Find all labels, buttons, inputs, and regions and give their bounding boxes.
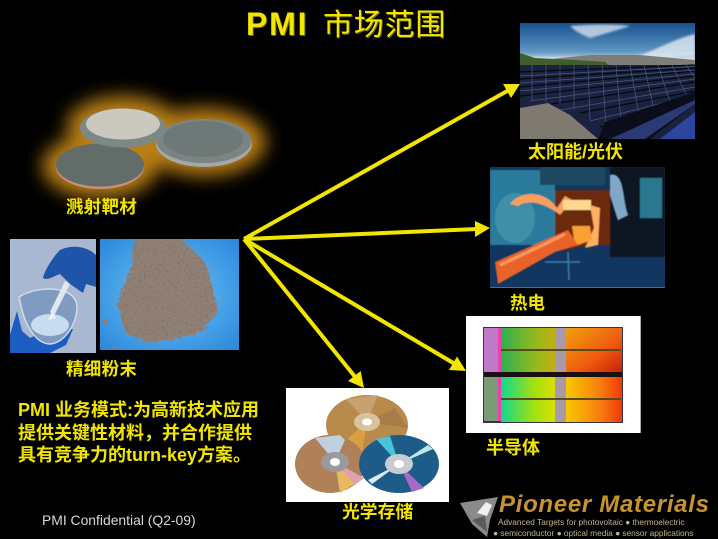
arrow: to optical storage [244, 239, 364, 388]
photo: semiconductor die [466, 316, 641, 433]
arrow: to solar [244, 84, 520, 239]
label: solar: 太阳能/光伏 [528, 142, 623, 162]
logo tagline: ● semiconductor ● optical media ● sensor applications [493, 528, 693, 538]
business model text: 提供关键性材料，并合作提供 [18, 423, 252, 443]
label: thermoelectric: 热电 [510, 293, 545, 313]
logo wordmark: Pioneer Materials [499, 491, 710, 518]
label: sputtering targets: 溅射靶材 [66, 197, 137, 217]
business model text: 具有竞争力的turn-key方案。 [18, 445, 251, 465]
business model text [18, 400, 259, 465]
title: PMI [246, 6, 308, 42]
logo mark [460, 497, 498, 537]
business model text: PMI 业务模式:为高新技术应用 [18, 400, 259, 420]
logo tagline [493, 517, 694, 538]
photo: glowing thermoelectric engine [490, 167, 665, 288]
photo: hand with glass mortar [10, 239, 96, 353]
footer confidentiality: PMI Confidential (Q2-09) [42, 512, 196, 528]
label: semiconductor: 半导体 [486, 438, 540, 458]
label: optical storage: 光学存储 [342, 502, 413, 522]
photo: optical discs [286, 388, 449, 502]
arrow: to thermoelectric [244, 221, 490, 239]
logo tagline: Advanced Targets for photovoltaic ● thermoelectric [498, 517, 685, 527]
title [246, 6, 446, 42]
label: fine powder: 精细粉末 [66, 359, 137, 379]
photo: fine powder pile [100, 236, 239, 350]
photo: sputtering target discs [42, 96, 266, 198]
arrow: to semiconductor [244, 239, 466, 371]
photo: solar panel field [520, 23, 695, 139]
title: 市场范围 [323, 9, 446, 42]
